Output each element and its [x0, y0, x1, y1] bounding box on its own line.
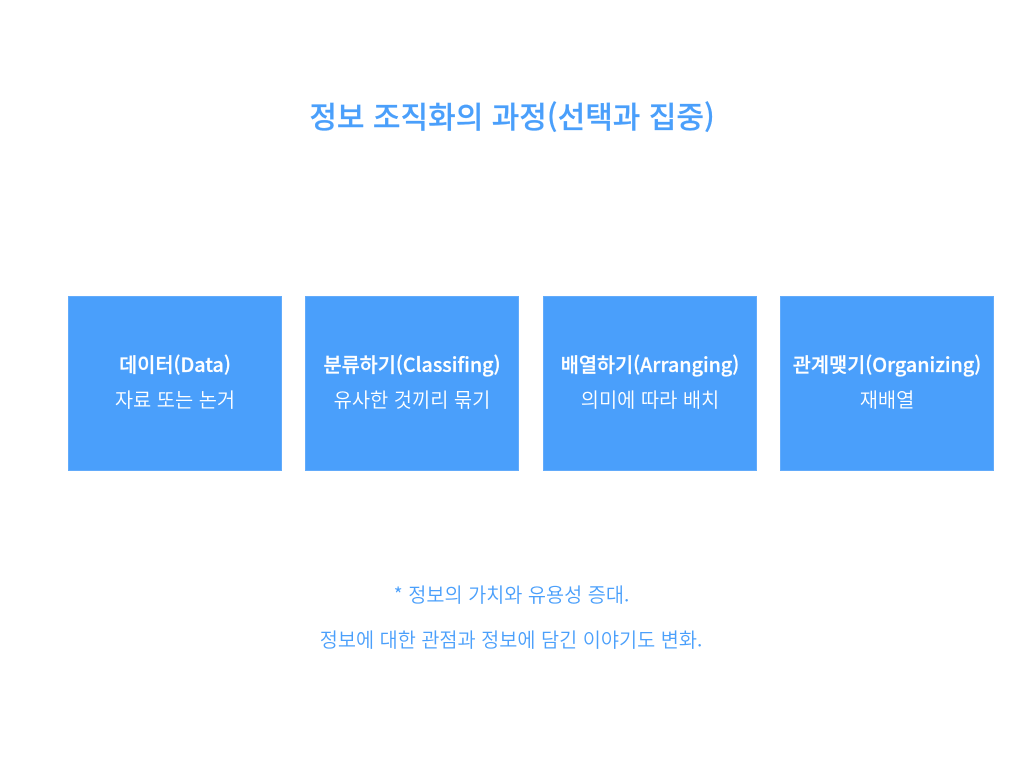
heading: arranging: 배열하기(Arranging) [561, 349, 739, 378]
heading: data: 데이터(Data) [119, 349, 231, 378]
heading: classifying: 분류하기(Classifing) [323, 349, 501, 378]
text: organizing description: 재배열 [860, 384, 914, 413]
panel: data [68, 296, 282, 471]
text: arranging description: 의미에 따라 배치 [581, 384, 719, 413]
panel: arranging [543, 296, 757, 471]
text: classifying description: 유사한 것끼리 묶기 [334, 384, 490, 413]
panel: organizing [780, 296, 994, 471]
text: data description: 자료 또는 논거 [115, 384, 235, 413]
panel: classifying [305, 296, 519, 471]
footnote line 1: * 정보의 가치와 유용성 증대. [394, 579, 629, 608]
heading: organizing: 관계맺기(Organizing) [793, 349, 981, 378]
footnote line 2: 정보에 대한 관점과 정보에 담긴 이야기도 변화. [320, 624, 702, 653]
title: 정보 조직화의 과정(선택과 집중) [309, 93, 715, 137]
